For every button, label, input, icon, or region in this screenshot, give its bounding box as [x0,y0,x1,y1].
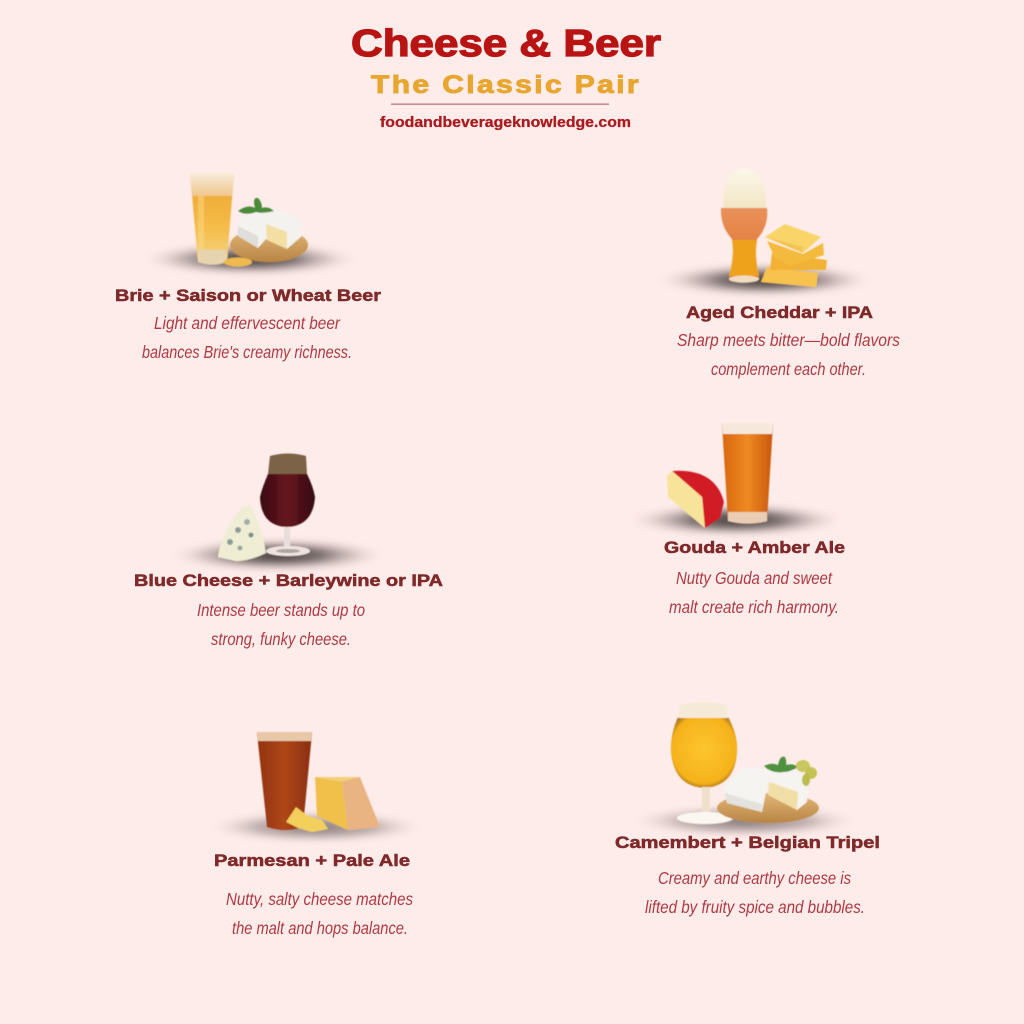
description: complement each other. [711,359,866,379]
heading: Parmesan + Pale Ale [214,851,410,870]
panel: parmesan and pale ale [204,732,428,938]
description: Sharp meets bitter—bold flavors [677,330,900,350]
icon: barleywine tulip and blue cheese [166,454,390,573]
description [645,868,865,917]
description: lifted by fruity spice and bubbles. [645,897,865,917]
icon: pale ale pint and parmesan [204,732,428,844]
description [226,889,413,938]
description [677,330,900,379]
description [142,313,352,362]
panel: aged cheddar and IPA [653,168,900,379]
heading: Brie + Saison or Wheat Beer [115,286,381,305]
icon: IPA glass and cheddar slices [653,168,877,298]
title: Cheese & Beer [351,23,661,65]
description: balances Brie's creamy richness. [142,342,352,362]
description: Intense beer stands up to [197,600,365,620]
icon: tripel tulip and camembert [627,702,863,838]
heading: Gouda + Amber Ale [664,538,845,557]
icon: amber ale pint and gouda wedge [624,423,848,538]
description: Creamy and earthy cheese is [658,868,851,888]
panel: gouda and amber ale [624,423,848,617]
description: the malt and hops balance. [232,918,408,938]
description: Nutty Gouda and sweet [676,568,833,588]
heading: Blue Cheese + Barleywine or IPA [134,571,443,590]
panel: blue cheese and barleywine [134,454,443,649]
description: Light and effervescent beer [154,313,341,333]
description [197,600,365,649]
heading: Aged Cheddar + IPA [686,303,873,322]
description [669,568,839,617]
website: foodandbeverageknowledge.com [380,115,631,131]
panel: camembert and belgian tripel [615,702,880,917]
description: Nutty, salty cheese matches [226,889,413,909]
panel: brie and saison [115,173,381,362]
icon: wheat beer and brie [138,173,362,277]
heading: Camembert + Belgian Tripel [615,833,880,852]
description: malt create rich harmony. [669,597,839,617]
subtitle: The Classic Pair [371,71,641,99]
description: strong, funky cheese. [211,629,351,649]
